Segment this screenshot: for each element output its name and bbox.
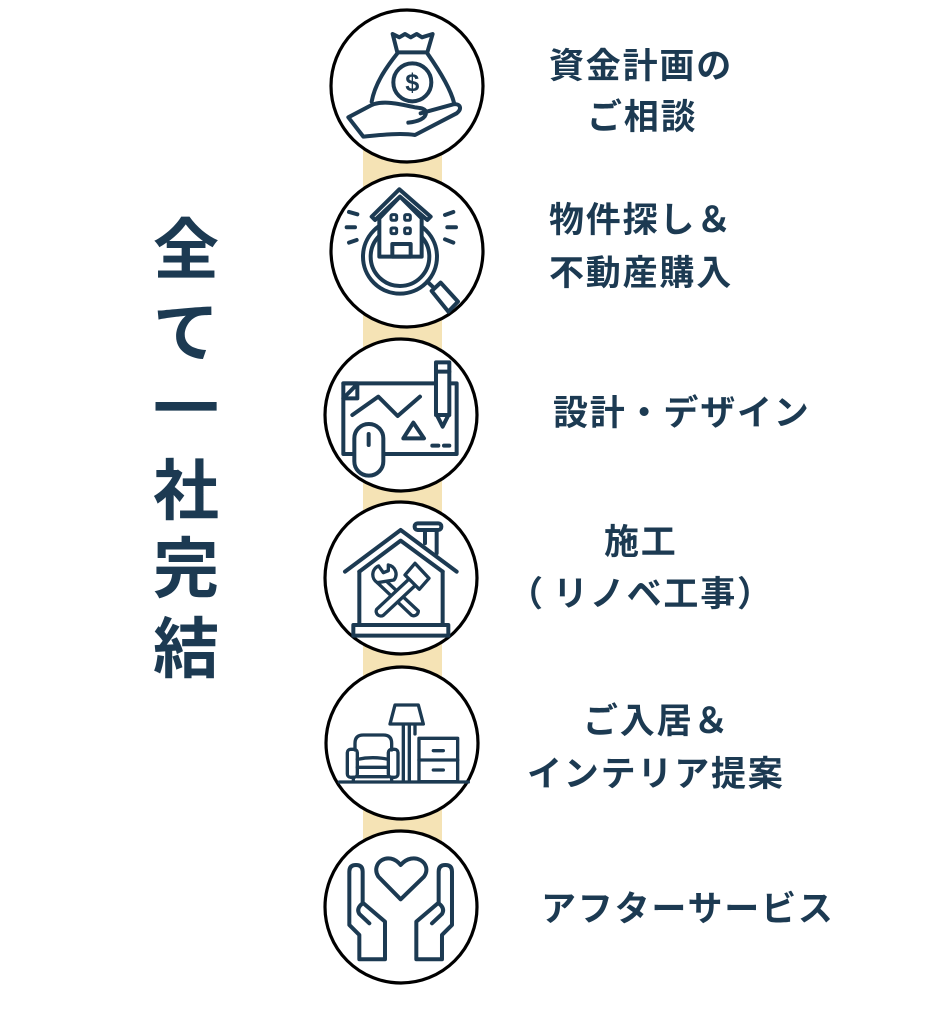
step 2 label: 物件探し＆ [549,201,733,240]
step 1 label: ご相談 [587,98,697,137]
title: vertical heading: 結 [153,612,219,686]
step 2 label: 不動産購入 [549,254,733,293]
title: vertical heading: 完 [153,532,219,606]
title: vertical heading [153,213,219,686]
step 5 label: インテリア提案 [527,755,785,794]
step 6 circle: hands and heart icon [325,831,477,983]
step 1 label [549,47,733,137]
step 3 label: 設計・デザイン [553,393,811,433]
step 5 label [527,702,785,794]
title: vertical heading: 全 [153,213,219,287]
step 6 label: アフターサービス [541,890,835,929]
step 1 label: 資金計画の [549,47,733,86]
step 4 label [508,523,774,614]
step 4 label: 施工 [604,523,678,562]
step 5 label: ご入居＆ [583,702,730,741]
step 4 label: ） [737,575,774,614]
step 1 circle: money bag icon [331,10,483,162]
title: vertical heading: 一 [153,372,219,446]
title: vertical heading: 社 [153,454,219,528]
step 5 circle: furniture icon [326,667,478,819]
step 4 label: （ [508,575,545,614]
step 2 label [549,201,733,293]
step 3 circle: blueprint design icon [325,339,477,491]
step 4 label: リノベ工事 [553,575,737,614]
connecting vertical band [363,140,442,850]
step 1 circle: money bag icon: $ [405,69,419,97]
step 2 circle: house and magnifier icon [331,175,483,327]
step 4 circle: house with tools icon [325,502,477,654]
title: vertical heading: て [153,296,219,370]
